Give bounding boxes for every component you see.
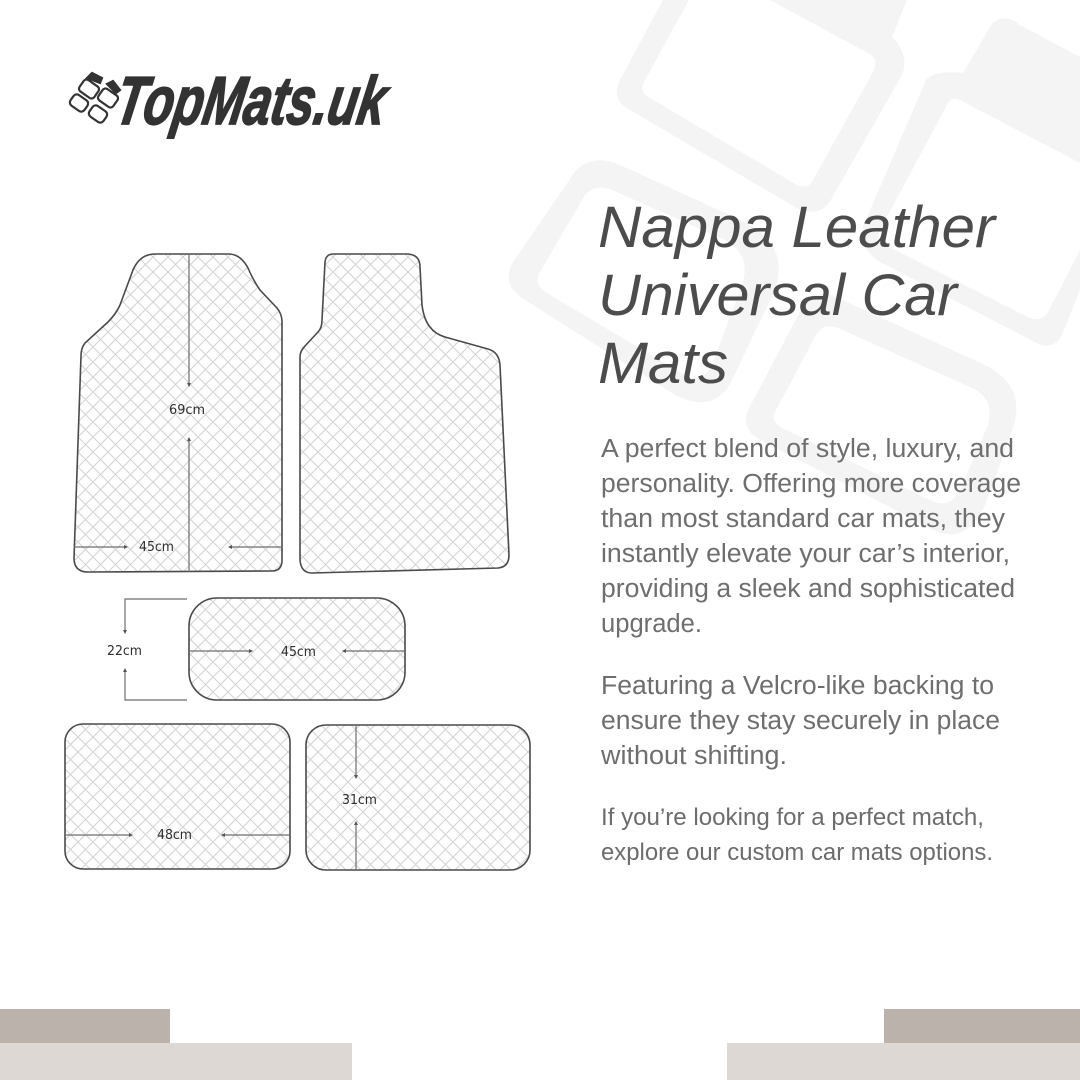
handwritten note: custom mats: If you’re looking for a perfect match, (601, 804, 984, 831)
paragraph: product description: A perfect blend of style, luxury, and (601, 435, 1014, 463)
paragraph: product description: upgrade. (601, 610, 702, 638)
paragraph: velcro backing (600, 672, 1000, 770)
paragraph: product description: providing a sleek and sophisticated (601, 575, 1015, 603)
paragraph: product description (601, 435, 1021, 638)
label: 45cm: 45cm (281, 645, 316, 660)
paragraph: velcro backing: Featuring a Velcro-like backing to (601, 672, 994, 700)
label: 31cm: 31cm (342, 793, 377, 808)
rear right mat with dimensions (306, 725, 530, 870)
handwritten note: custom mats (601, 804, 993, 866)
icon: four car mats (68, 73, 120, 124)
label: 22cm: 22cm (107, 644, 142, 659)
rear left mat with dimensions (65, 724, 290, 869)
logo: TopMats.uk (68, 62, 395, 139)
footer bars left (0, 1009, 352, 1080)
label: 45cm: 45cm (139, 540, 174, 555)
paragraph: product description: personality. Offering more coverage (601, 470, 1021, 498)
title: Mats (598, 331, 728, 396)
front passenger mat (300, 254, 509, 573)
label: 69cm: 69cm (169, 403, 205, 418)
logo wordmark: TopMats.uk (110, 62, 395, 139)
label: 48cm: 48cm (157, 828, 192, 843)
paragraph: velcro backing: without shifting. (600, 742, 787, 770)
title: Universal Car (598, 263, 960, 328)
background watermark: car mat outlines (509, 0, 1080, 534)
title (598, 195, 998, 396)
title: Nappa Leather (598, 195, 998, 260)
paragraph: product description: than most standard car mats, they (601, 505, 1005, 533)
paragraph: product description: instantly elevate your car’s interior, (601, 540, 1010, 568)
paragraph: velcro backing: ensure they stay securely in place (601, 707, 1000, 735)
front driver mat with dimensions (74, 254, 282, 572)
footer bars right (727, 1009, 1080, 1080)
handwritten note: custom mats: explore our custom car mats options. (601, 839, 993, 866)
small centre mat with dimensions (107, 598, 405, 700)
